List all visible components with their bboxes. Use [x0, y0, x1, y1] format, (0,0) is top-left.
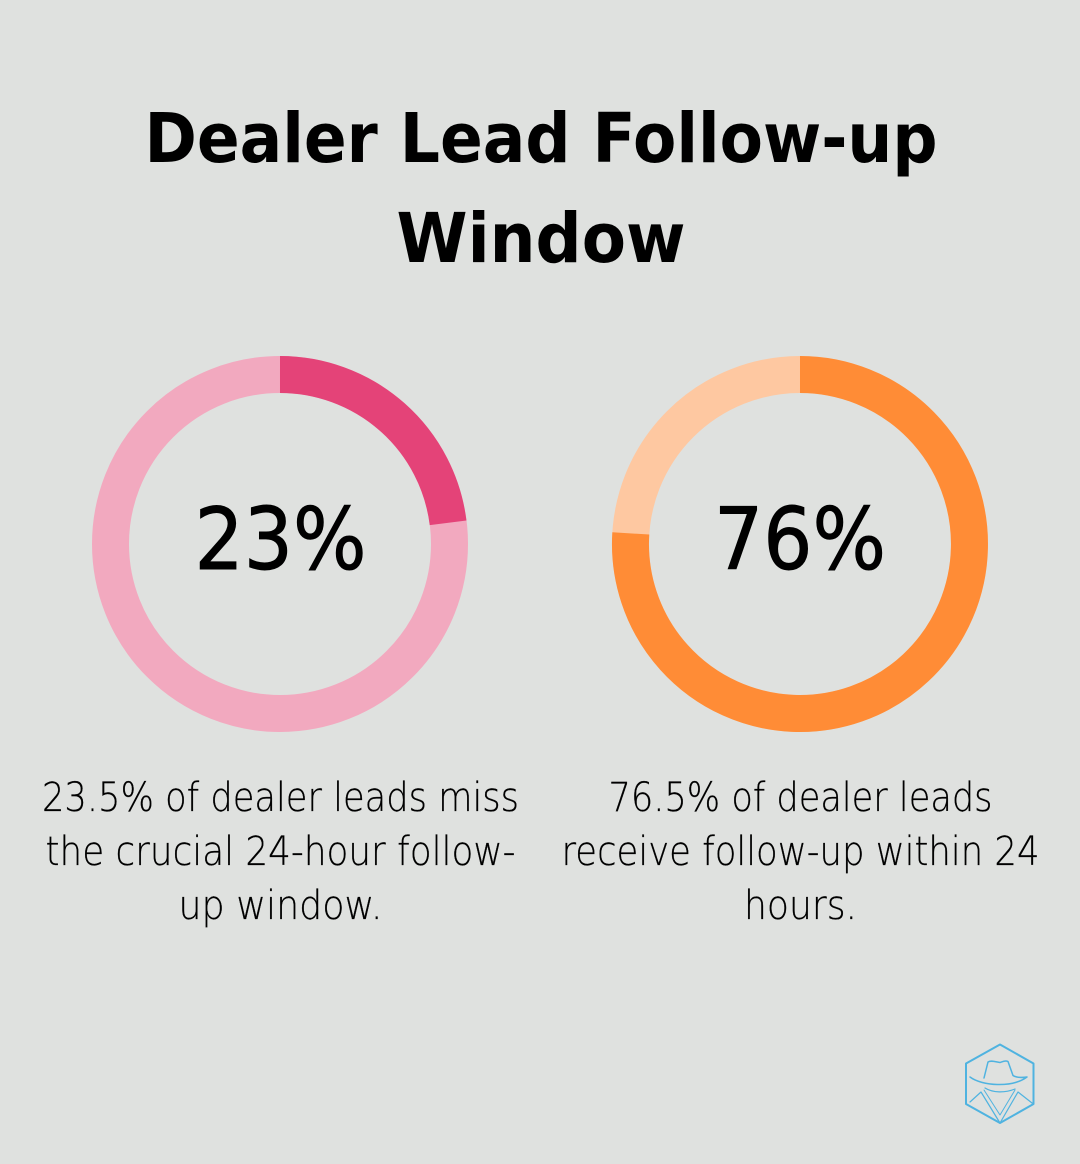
title: Window: [396, 199, 686, 279]
stat: 23%: 23%: [194, 490, 366, 590]
caption: 23.5%: [42, 775, 519, 929]
donut chart: 76%: [630, 374, 970, 714]
caption: 23.5%: up window.: [178, 883, 382, 929]
panel: 76% received follow-up: [562, 374, 1040, 929]
donut chart: 23%: [110, 374, 450, 714]
caption: 23.5%: 23.5% of dealer leads miss: [42, 775, 519, 821]
caption: 23.5%: the crucial 24-hour follow-: [46, 829, 516, 875]
caption: 76.5%: [562, 775, 1040, 929]
caption: 76.5%: 76.5% of dealer leads: [608, 775, 992, 821]
panel: 23% missed follow-up: [42, 374, 519, 929]
icon: hexagon logo with hat-wearing spy: [966, 1044, 1034, 1123]
stat: 76%: 76%: [714, 490, 886, 590]
title: [144, 99, 938, 279]
caption: 76.5%: hours.: [744, 883, 857, 929]
title: Dealer Lead Follow-up: [144, 99, 938, 179]
